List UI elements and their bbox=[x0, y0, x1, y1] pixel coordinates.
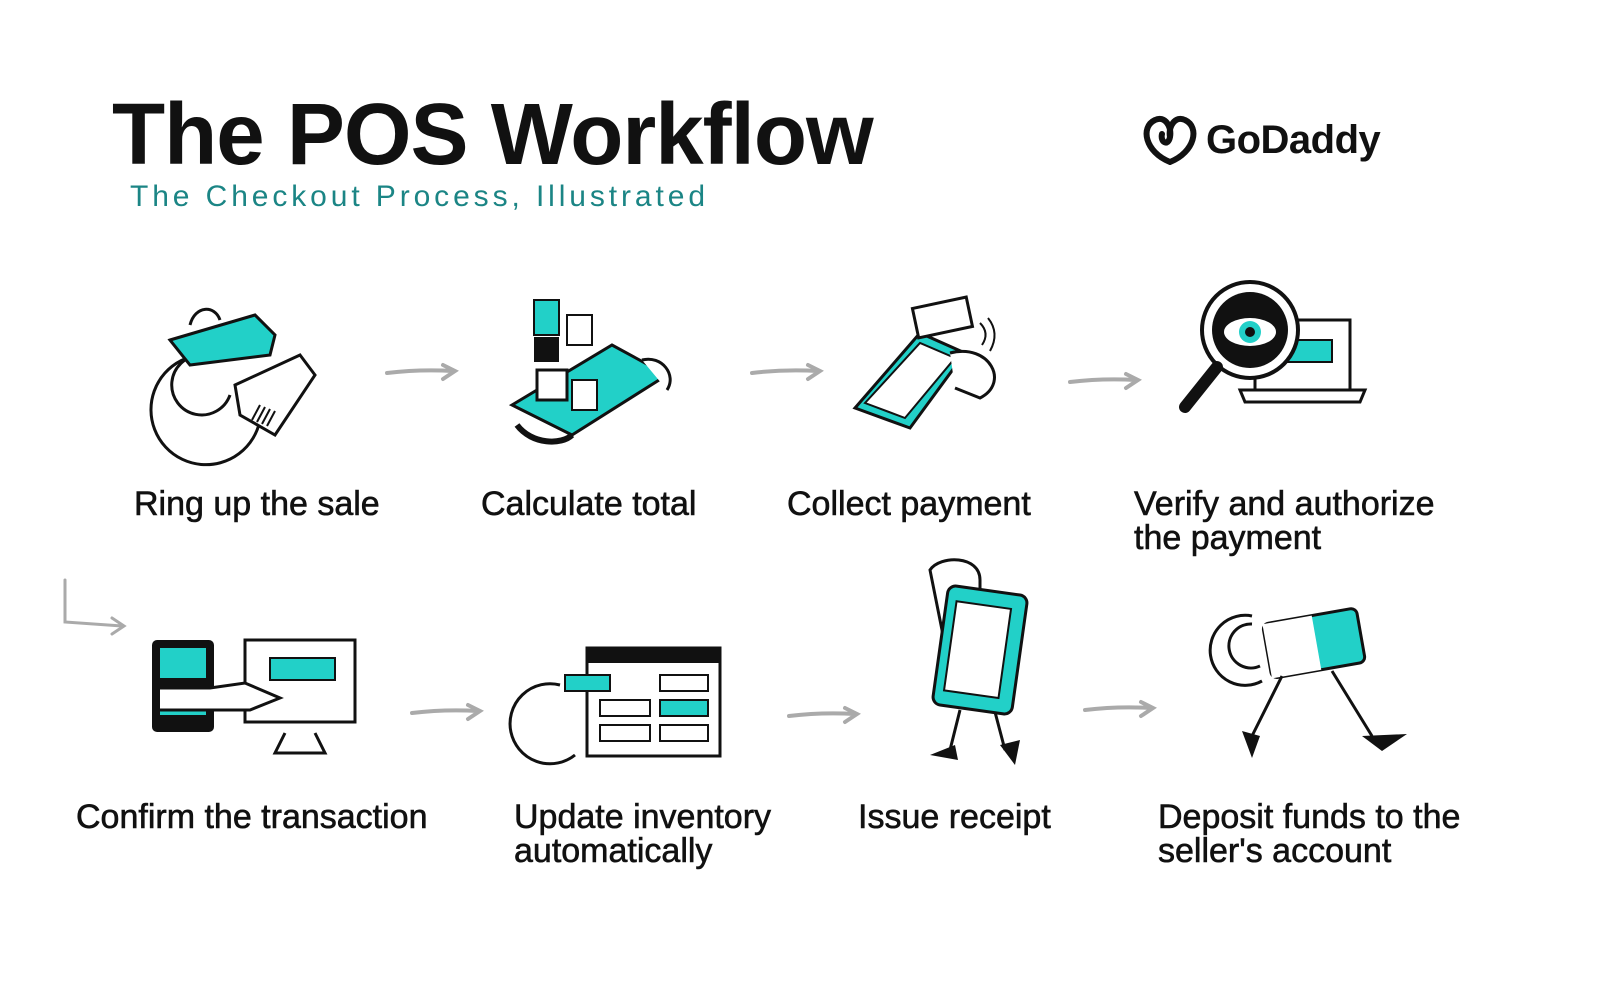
label: Ring up the sale: Ring up the sale bbox=[134, 485, 380, 523]
icon: magnifier laptop bbox=[1179, 280, 1368, 413]
arrow bbox=[410, 702, 484, 722]
label: Verify and authorize: the payment bbox=[1134, 519, 1321, 557]
label: Verify and authorize bbox=[1134, 485, 1435, 557]
label: Update inventory: Update inventory bbox=[514, 798, 771, 836]
label: Deposit funds bbox=[1158, 798, 1460, 870]
label: Deposit funds: Deposit funds to the bbox=[1158, 798, 1460, 836]
label: Confirm the transaction: Confirm the transaction bbox=[76, 798, 428, 836]
icon: calculator bbox=[509, 299, 672, 445]
label: Issue receipt: Issue receipt bbox=[858, 798, 1051, 836]
title: The POS Workflow bbox=[112, 86, 873, 183]
arrow bbox=[787, 706, 861, 724]
icon: card reader bbox=[852, 295, 996, 430]
subtitle: The Checkout Process, Illustrated bbox=[130, 180, 709, 213]
arrow bbox=[750, 362, 824, 382]
arrow bbox=[1068, 372, 1142, 390]
label: Update inventory: automatically bbox=[514, 832, 712, 870]
icon: barcode scanner bbox=[149, 308, 317, 466]
icon: handshake screens bbox=[152, 638, 356, 754]
label: Calculate total: Calculate total bbox=[481, 485, 696, 523]
icon: walking credit card bbox=[1208, 607, 1407, 758]
logo: GoDaddy bbox=[1144, 116, 1380, 165]
arrow bbox=[385, 362, 459, 382]
label: Verify and authorize: Verify and authorize bbox=[1134, 485, 1435, 523]
logo: GoDaddy: GoDaddy bbox=[1206, 118, 1380, 162]
label: Collect payment: Collect payment bbox=[787, 485, 1031, 523]
arrow: row turn bbox=[64, 578, 126, 636]
icon: inventory window bbox=[508, 646, 722, 766]
label: Deposit funds: seller's account bbox=[1158, 832, 1391, 870]
label: Update inventory bbox=[514, 798, 772, 870]
arrow bbox=[1083, 700, 1157, 718]
icon: receipt character bbox=[928, 558, 1028, 765]
